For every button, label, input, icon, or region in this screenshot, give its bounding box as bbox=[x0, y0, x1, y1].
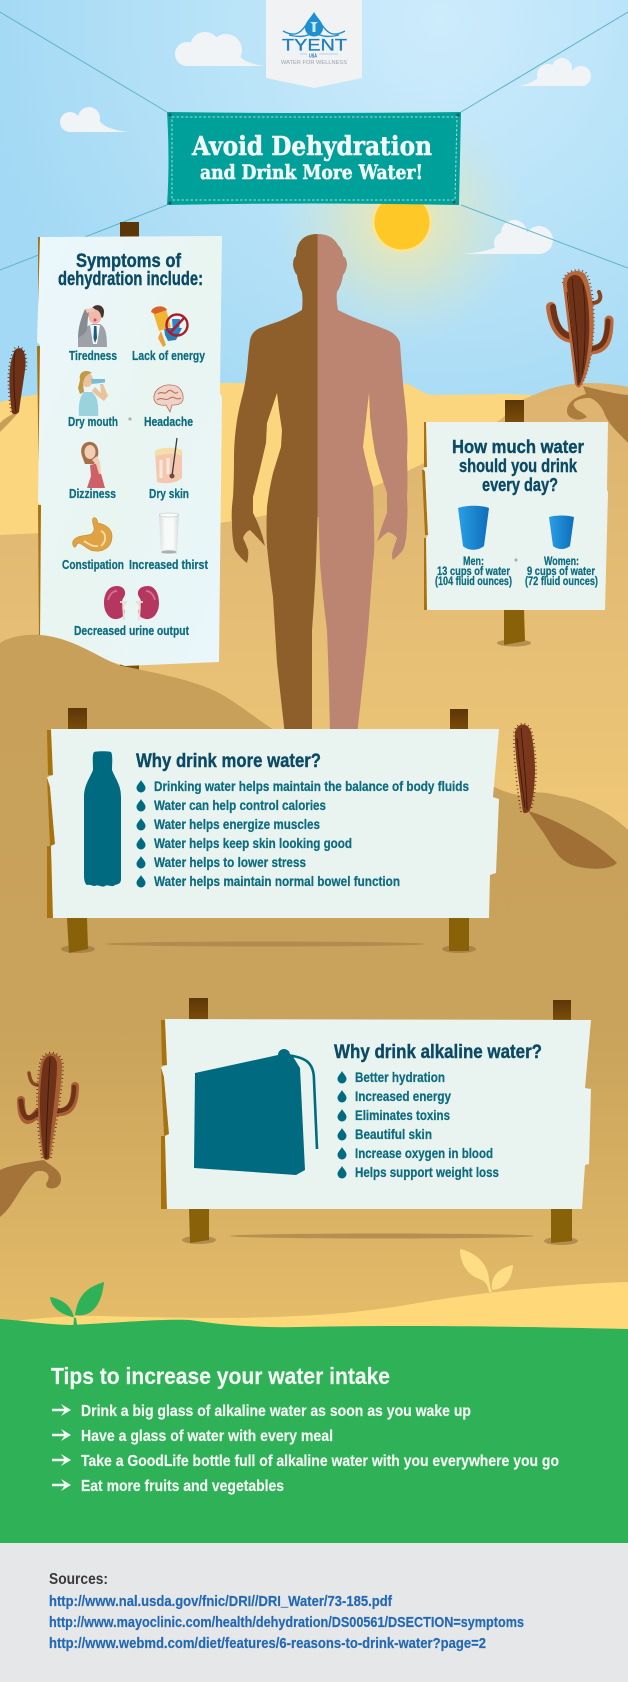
symptoms heading: Symptoms of bbox=[76, 251, 182, 272]
icon: dry skin bbox=[155, 438, 182, 483]
icon: dizzy woman bbox=[81, 442, 105, 488]
label: decreased urine output: Decreased urine output bbox=[74, 623, 190, 638]
how much water sign bbox=[422, 422, 608, 610]
bullet list: alkaline benefits: Better hydration bbox=[355, 1069, 445, 1085]
women amount: Women: bbox=[544, 556, 579, 568]
women amount bbox=[525, 556, 598, 588]
mark bbox=[514, 558, 518, 562]
symptoms heading bbox=[58, 251, 203, 290]
label: dry mouth: Dry mouth bbox=[68, 414, 118, 429]
why drink more water sign bbox=[47, 729, 499, 918]
sky background bbox=[0, 0, 628, 460]
cloud top right bbox=[520, 58, 591, 86]
title line 2: and Drink More Water! bbox=[200, 160, 423, 184]
symptoms sign bbox=[37, 236, 222, 666]
cactus shadow middle right bbox=[528, 811, 617, 869]
figure left half bbox=[232, 234, 318, 735]
icon: water ionizer bbox=[194, 1049, 317, 1175]
label: lack of energy: Lack of energy bbox=[132, 348, 206, 363]
why drink alkaline water sign bbox=[161, 1019, 591, 1209]
symptoms heading: dehydration include: bbox=[58, 269, 203, 290]
cactus shadow top left bbox=[0, 413, 18, 432]
bullet list: alkaline benefits: Increase oxygen in blood bbox=[355, 1145, 493, 1161]
cactus shadow bottom left bbox=[0, 1160, 61, 1217]
tips list: Take a GoodLife bottle full of alkaline water with you everywhere you go bbox=[81, 1453, 559, 1470]
women amount: (72 fluid ounces) bbox=[525, 576, 598, 588]
bullet list: water benefits bbox=[136, 778, 469, 889]
figure right half bbox=[318, 234, 408, 735]
title line 1: Avoid Dehydration bbox=[191, 132, 432, 162]
bullet list: water benefits: Water helps maintain normal bowel function bbox=[154, 873, 400, 889]
sources heading: Sources: bbox=[49, 1571, 108, 1588]
cactus right bbox=[551, 270, 609, 388]
tips list: Have a glass of water with every meal bbox=[81, 1428, 333, 1445]
mid sand dune bbox=[0, 383, 628, 1400]
label: increased thirst: Increased thirst bbox=[129, 557, 209, 572]
men amount bbox=[435, 556, 512, 588]
tips list bbox=[52, 1403, 559, 1495]
heading: why drink alkaline water: Why drink alkaline water? bbox=[334, 1041, 542, 1063]
cloud left bbox=[60, 107, 128, 132]
water sign: posts bbox=[61, 708, 476, 953]
men amount: 13 cups of water bbox=[437, 566, 510, 578]
icon: stomach bbox=[73, 518, 112, 551]
green sprout bbox=[50, 1282, 104, 1330]
cloud top left bbox=[175, 32, 264, 66]
near sand dune bbox=[0, 635, 628, 1400]
cactus top left bbox=[8, 347, 27, 414]
bullet list: water benefits: Water helps to lower stress bbox=[154, 854, 306, 870]
panel: sources bbox=[0, 1543, 628, 1682]
symptoms sign post bbox=[120, 222, 139, 670]
water sign heading: should you drink bbox=[459, 455, 578, 476]
yellow sprout bbox=[460, 1249, 513, 1292]
sources links: http://www.webmd.com/diet/features/6-reasons-to-drink-water?page=2 bbox=[49, 1635, 486, 1652]
icon: women cup bbox=[549, 516, 574, 549]
tips list: Eat more fruits and vegetables bbox=[81, 1478, 284, 1495]
women amount: 9 cups of water bbox=[527, 566, 595, 578]
men amount: (104 fluid ounces) bbox=[435, 576, 512, 588]
icon: water bottle bbox=[84, 751, 121, 887]
icon: brain bbox=[154, 385, 183, 412]
sun glow bbox=[277, 97, 527, 347]
panel: tips bbox=[0, 1319, 628, 1543]
label: tiredness: Tiredness bbox=[69, 348, 117, 363]
icon: glass of water bbox=[159, 512, 179, 556]
water sign heading bbox=[452, 436, 584, 495]
label: dry skin: Dry skin bbox=[149, 486, 189, 501]
logo tab bbox=[266, 0, 362, 88]
label: dizziness: Dizziness bbox=[69, 486, 116, 501]
banner ropes bbox=[0, 12, 628, 270]
mark bbox=[128, 417, 132, 421]
bullet list: water benefits: Water helps energize muscles bbox=[154, 816, 320, 832]
water sign heading: How much water bbox=[452, 436, 584, 457]
bullet list: alkaline benefits: Helps support weight loss bbox=[355, 1164, 499, 1180]
bullet list: alkaline benefits: Beautiful skin bbox=[355, 1126, 432, 1142]
cactus bottom left bbox=[21, 1052, 75, 1160]
label: headache: Headache bbox=[144, 414, 193, 429]
bullet list: alkaline benefits: Increased energy bbox=[355, 1088, 451, 1104]
logo wordmark: TYENT bbox=[282, 36, 347, 54]
icon: tired man bbox=[78, 305, 107, 347]
front sand dune bbox=[0, 1282, 628, 1340]
cactus middle right bbox=[514, 724, 536, 813]
alkaline sign: posts bbox=[182, 998, 578, 1245]
cactus shadow right bbox=[567, 386, 628, 443]
logo tagline: WATER FOR WELLNESS bbox=[281, 60, 347, 66]
bullet list: alkaline benefits: Eliminates toxins bbox=[355, 1107, 450, 1123]
bullet list: water benefits: Water helps keep skin looking good bbox=[154, 835, 352, 851]
bullet list: alkaline benefits bbox=[338, 1069, 499, 1180]
human figure bbox=[232, 234, 408, 735]
heading: why drink more water: Why drink more water? bbox=[136, 750, 321, 772]
men amount: Men: bbox=[463, 556, 484, 568]
logo sub mark: USA bbox=[309, 54, 317, 60]
icon: men cup bbox=[458, 506, 489, 550]
how much water sign post bbox=[497, 400, 531, 646]
sources links bbox=[49, 1593, 524, 1652]
bullet list: water benefits: Water can help control calories bbox=[154, 797, 326, 813]
sources links: http://www.nal.usda.gov/fnic/DRI//DRI_Water/73-185.pdf bbox=[49, 1593, 393, 1610]
icon: woman drinking bbox=[78, 371, 108, 416]
sources links: http://www.mayoclinic.com/health/dehydration/DS00561/DSECTION=symptoms bbox=[49, 1614, 524, 1631]
title banner bbox=[167, 112, 461, 205]
sun bbox=[372, 192, 432, 252]
water sign heading: every day? bbox=[482, 474, 558, 495]
icon: lack of energy bbox=[151, 306, 188, 347]
logo mark bbox=[283, 12, 345, 37]
tips heading: Tips to increase your water intake bbox=[51, 1363, 390, 1389]
far sand dunes bbox=[0, 382, 628, 1400]
tips list: Drink a big glass of alkaline water as soon as you wake up bbox=[81, 1403, 471, 1420]
label: constipation: Constipation bbox=[62, 557, 124, 572]
bullet list: water benefits: Drinking water helps maintain the balance of body fluids bbox=[154, 778, 469, 794]
icon: kidneys bbox=[104, 586, 159, 620]
cloud right bbox=[463, 220, 553, 254]
